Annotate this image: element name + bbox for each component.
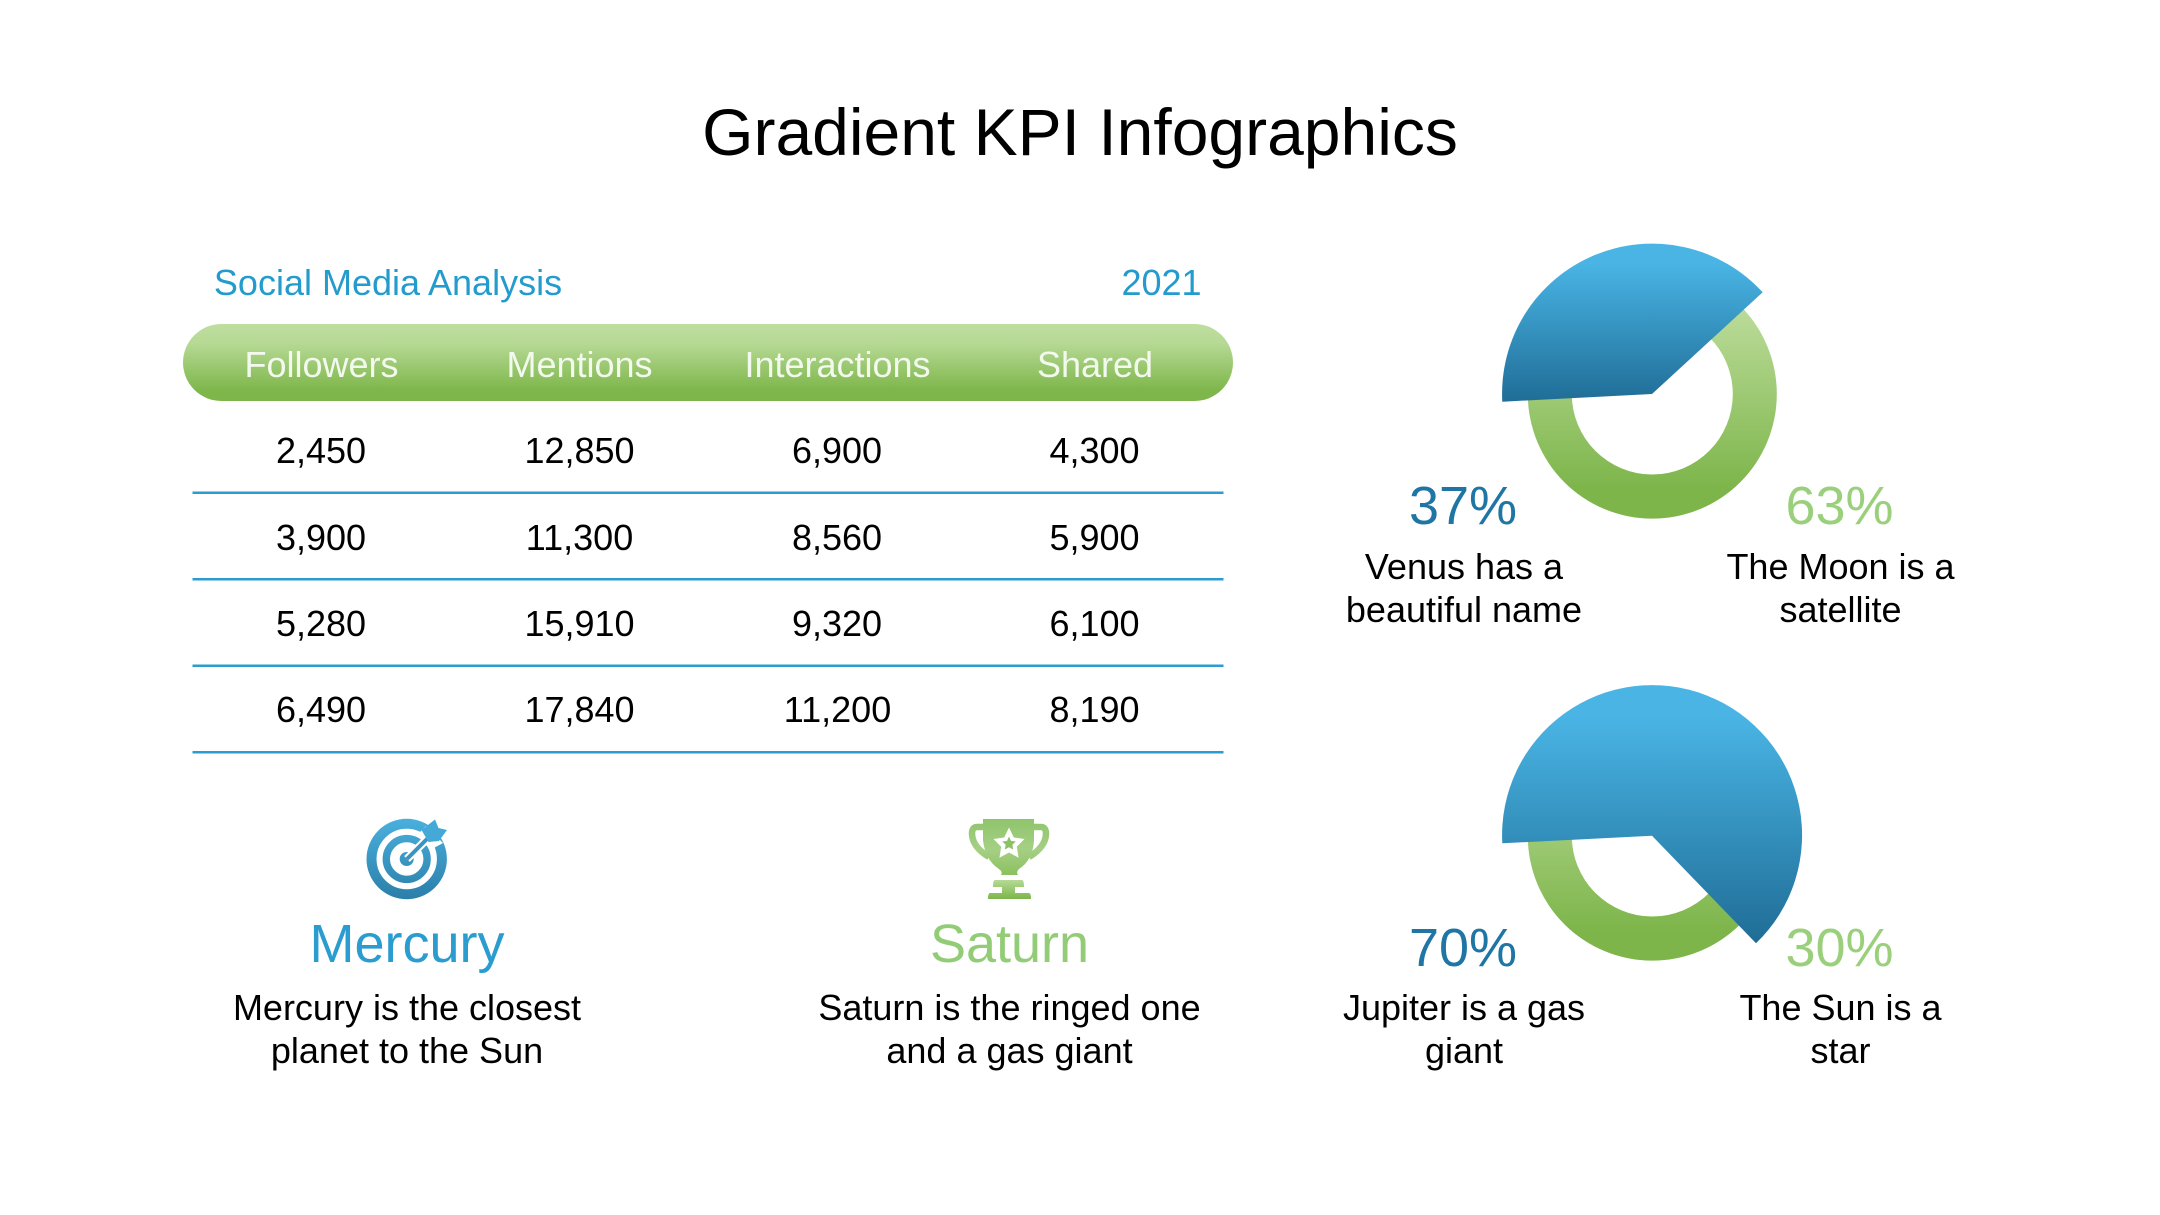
table header row: Interactions (744, 344, 931, 385)
Sun description: star (1810, 1030, 1871, 1071)
Moon value: 63% (1785, 476, 1894, 536)
table year: 2021 (1121, 262, 1202, 303)
panel: Jupiter and Sun chart (1343, 685, 1943, 1071)
Mercury heading: Mercury (309, 914, 505, 974)
table row 1: 4,300 (1049, 430, 1140, 471)
table row 3: 5,280 (276, 603, 366, 644)
table header row: Mentions (506, 344, 653, 385)
table row 1: 6,900 (792, 430, 882, 471)
panel: Saturn (818, 819, 1201, 1071)
table header row (183, 324, 1233, 401)
Venus value: 37% (1409, 476, 1517, 536)
donut chart 37 / 63 (1502, 244, 1777, 519)
table row 2: 11,300 (526, 517, 633, 558)
Venus description: Venus has a (1365, 546, 1564, 587)
Jupiter description: Jupiter is a gas (1343, 987, 1585, 1028)
Jupiter description (1343, 987, 1585, 1071)
icon: target with arrow (372, 820, 447, 894)
icon: trophy with star (972, 819, 1046, 899)
table row 3 (192, 603, 1224, 667)
table heading: Social Media Analysis (214, 262, 562, 303)
title: Gradient KPI Infographics (702, 95, 1458, 169)
Sun value: 30% (1785, 918, 1894, 978)
table row 4 (192, 689, 1224, 754)
Sun description (1739, 987, 1943, 1071)
table row 1 (192, 430, 1224, 494)
table row 2 (192, 517, 1224, 580)
table row 1: 2,450 (276, 430, 366, 471)
table row 4: 11,200 (784, 689, 891, 730)
table row 3: 15,910 (524, 603, 635, 644)
Jupiter value: 70% (1409, 918, 1517, 978)
table header row: Followers (244, 344, 399, 385)
table row 3: 9,320 (792, 603, 882, 644)
panel: Mercury (233, 820, 581, 1071)
table row 2: 8,560 (792, 517, 882, 558)
panel: Venus and Moon chart (1346, 244, 1956, 630)
table row 4: 6,490 (276, 689, 366, 730)
Moon description: satellite (1779, 589, 1902, 630)
Saturn description: and a gas giant (886, 1030, 1133, 1071)
Sun description: The Sun is a (1739, 987, 1943, 1028)
Venus description (1346, 546, 1582, 630)
Mercury description: Mercury is the closest (233, 987, 581, 1028)
table header row: Shared (1037, 344, 1153, 385)
Moon description (1726, 546, 1956, 630)
table row 2: 3,900 (276, 517, 366, 558)
table row 4: 8,190 (1049, 689, 1140, 730)
Saturn description: Saturn is the ringed one (818, 987, 1201, 1028)
Mercury description (233, 987, 581, 1071)
Saturn description (818, 987, 1201, 1071)
Jupiter description: giant (1425, 1030, 1503, 1071)
donut chart 70 / 30 (1502, 685, 1802, 961)
Mercury description: planet to the Sun (271, 1030, 543, 1071)
table row 2: 5,900 (1049, 517, 1140, 558)
Moon description: The Moon is a (1726, 546, 1956, 587)
table row 3: 6,100 (1049, 603, 1140, 644)
table row 1: 12,850 (524, 430, 635, 471)
panel: social media table (183, 262, 1233, 754)
Venus description: beautiful name (1346, 589, 1582, 630)
table row 4: 17,840 (524, 689, 635, 730)
Saturn heading: Saturn (930, 914, 1089, 974)
